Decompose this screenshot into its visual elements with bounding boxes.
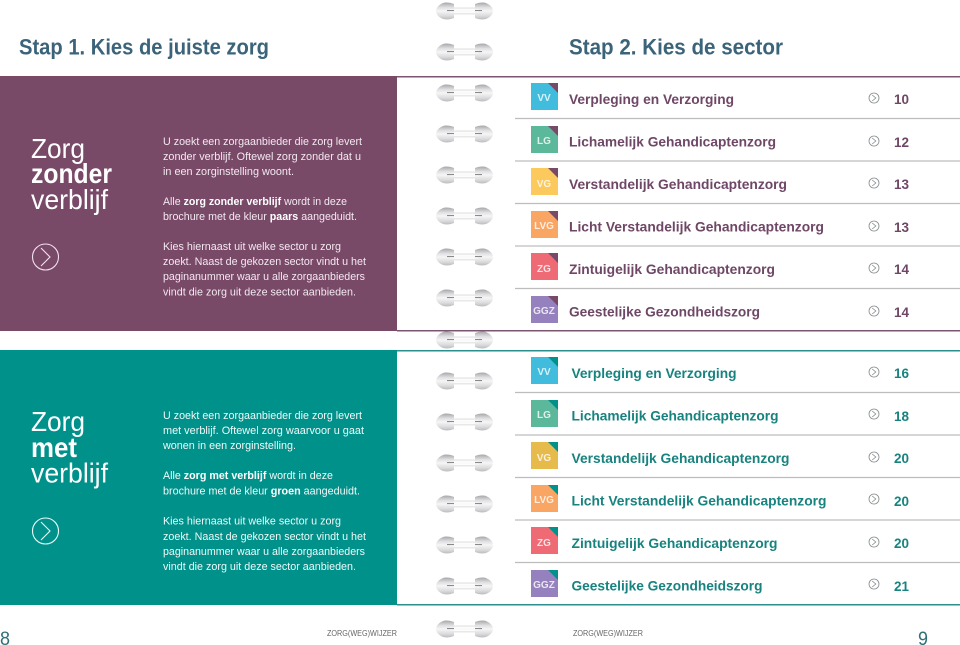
row: VV: 16: [894, 365, 909, 381]
row: GGZ: 21: [894, 578, 909, 594]
row: GGZ: Geestelijke Gezondheidszorg: [572, 578, 762, 594]
row: GGZ: 14: [894, 304, 909, 320]
row: LVG: 13: [894, 219, 909, 235]
text block: uitleg met verblijf: vindt die zorg uit deze sector aanbieden.: [163, 561, 356, 573]
text block: uitleg zonder verblijf: zonder verblijf. Oftewel zorg zonder dat u: [163, 151, 361, 163]
row: LVG: LVG: [534, 495, 554, 506]
row: ZG: [531, 253, 909, 280]
row: LVG: [531, 211, 909, 238]
list: sectoren zonder verblijf: [531, 83, 909, 323]
heading: stap 2: Stap 2. Kies de sector: [569, 34, 783, 60]
text block: uitleg zonder verblijf: vindt die zorg uit deze sector aanbieden.: [163, 286, 356, 298]
icon: arrow circle: [32, 518, 58, 544]
text block: uitleg zonder verblijf: Kies hiernaast uit welke sector u zorg: [163, 241, 341, 253]
row: VV: VV: [537, 93, 551, 104]
row: LG: LG: [537, 410, 551, 421]
heading: stap 1: Stap 1. Kies de juiste zorg: [19, 34, 269, 60]
row: VV: [531, 357, 909, 384]
purple list frame lines: [397, 76, 960, 332]
text block: uitleg met verblijf: Kies hiernaast uit welke sector u zorg: [163, 516, 341, 528]
row: ZG: ZG: [537, 538, 551, 549]
row: VG: [531, 168, 909, 195]
text block: uitleg zonder verblijf: brochure met de kleur paars aangeduidt.: [163, 211, 357, 223]
row: ZG: [531, 527, 909, 554]
title: zorg met verblijf: [31, 406, 108, 488]
text block: uitleg zonder verblijf: [163, 136, 366, 298]
row: VV: Verpleging en Verzorging: [569, 91, 734, 107]
text block: uitleg zonder verblijf: zoekt. Naast de gekozen sector vindt u het: [163, 256, 366, 268]
row: LG: LG: [537, 136, 551, 147]
title: zorg zonder verblijf: zonder: [31, 158, 112, 189]
teal list frame lines: [397, 350, 960, 606]
row: VG: 13: [894, 176, 909, 192]
row: VV: VV: [537, 367, 551, 378]
title: zorg met verblijf: verblijf: [31, 458, 108, 488]
row: ZG: Zintuigelijk Gehandicaptenzorg: [572, 535, 778, 551]
row: VG: VG: [537, 453, 551, 464]
row: LVG: Licht Verstandelijk Gehandicaptenzorg: [569, 218, 824, 234]
text block: uitleg met verblijf: [162, 410, 366, 573]
title: zorg met verblijf: met: [31, 432, 77, 463]
title: zorg met verblijf: Zorg: [31, 406, 85, 437]
text block: uitleg met verblijf: wonen in een zorginstelling.: [162, 440, 296, 452]
row: ZG: ZG: [537, 264, 551, 275]
row: VG: Verstandelijk Gehandicaptenzorg: [572, 450, 790, 466]
row: LG: [531, 126, 909, 153]
row: VG: 20: [894, 450, 909, 466]
panel: zorg zonder verblijf: [0, 76, 397, 331]
text block: uitleg met verblijf: paginanummer waar u alle zorgaanbieders: [163, 546, 365, 558]
row: GGZ: GGZ: [533, 580, 555, 591]
row: GGZ: [531, 296, 909, 323]
row: ZG: Zintuigelijk Gehandicaptenzorg: [569, 261, 775, 277]
text block: uitleg zonder verblijf: in een zorginstelling woont.: [163, 166, 294, 178]
text block: uitleg zonder verblijf: Alle zorg zonder verblijf wordt in deze: [163, 196, 347, 208]
row: LG: [531, 400, 909, 427]
text block: uitleg met verblijf: U zoekt een zorgaanbieder die zorg levert: [163, 410, 362, 422]
row: GGZ: GGZ: [533, 306, 555, 317]
row: LG: 18: [894, 408, 909, 424]
row: LVG: [531, 485, 909, 512]
text block: uitleg met verblijf: brochure met de kleur groen aangeduidt.: [163, 486, 360, 498]
row: LG: Lichamelijk Gehandicaptenzorg: [569, 134, 776, 150]
row: GGZ: [531, 570, 909, 597]
title: zorg zonder verblijf: verblijf: [31, 184, 108, 215]
title: zorg zonder verblijf: [31, 133, 112, 215]
row: LG: Lichamelijk Gehandicaptenzorg: [572, 408, 778, 424]
row: LVG: LVG: [534, 221, 554, 232]
row: LVG: Licht Verstandelijk Gehandicaptenzorg: [572, 492, 826, 508]
title: zorg zonder verblijf: Zorg: [31, 133, 85, 164]
row: VV: [531, 83, 909, 110]
text block: uitleg met verblijf: zoekt. Naast de gekozen sector vindt u het: [163, 531, 366, 543]
row: VG: Verstandelijk Gehandicaptenzorg: [569, 176, 787, 192]
row: VG: [531, 442, 909, 469]
text block: uitleg zonder verblijf: U zoekt een zorgaanbieder die zorg levert: [163, 136, 362, 148]
row: VV: 10: [894, 91, 909, 107]
row: VV: Verpleging en Verzorging: [572, 365, 736, 381]
footer label left: ZORG(WEG)WIJZER: [327, 629, 397, 638]
panel: zorg met verblijf: [0, 350, 397, 605]
row: LG: 12: [894, 134, 909, 150]
list: sectoren met verblijf: [531, 357, 909, 597]
text block: uitleg zonder verblijf: paginanummer waar u alle zorgaanbieders: [163, 271, 365, 283]
row: ZG: 20: [894, 535, 909, 551]
footer label right: ZORG(WEG)WIJZER: [573, 629, 643, 638]
row: GGZ: Geestelijke Gezondheidszorg: [569, 304, 760, 320]
row: ZG: 14: [894, 261, 909, 277]
text block: uitleg met verblijf: Alle zorg met verblijf wordt in deze: [163, 470, 333, 482]
row: VG: VG: [537, 179, 551, 190]
text block: uitleg met verblijf: met verblijf. Oftewel zorg waarvoor u gaat: [163, 425, 364, 437]
row: LVG: 20: [894, 493, 909, 509]
icon: arrow circle: [32, 244, 58, 270]
spiral binding rings: [436, 2, 493, 638]
